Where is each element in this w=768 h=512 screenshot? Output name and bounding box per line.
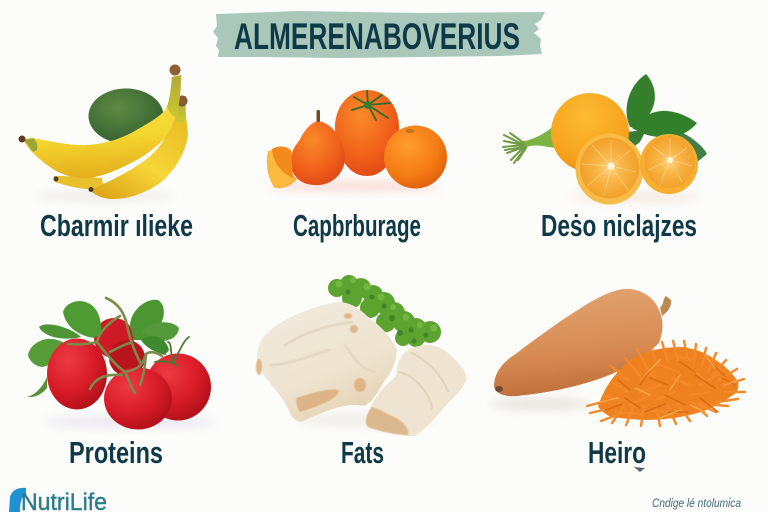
- icon: small banana tip: [54, 176, 104, 190]
- icon: sweet potato: [494, 289, 662, 396]
- label: carbohydrates-like label: Capbrburage: [293, 208, 421, 243]
- panel: orange fruits and tomato: [267, 90, 447, 190]
- label: heiro: Heiro: [588, 435, 646, 470]
- label: bananas: Cbarmir ılieke: [40, 208, 193, 243]
- footer note: Cndige lé ntolumica: [652, 498, 741, 510]
- panel: tomatoes on vine: [27, 298, 215, 430]
- label: proteins: Proteins: [69, 435, 163, 470]
- icon: back tomatoes: [94, 318, 134, 358]
- icon: large tomato: [335, 90, 399, 176]
- icon: tomato right: [145, 354, 211, 420]
- panel: chicken and lettuce: [256, 275, 467, 436]
- icon: small stem leaf: [27, 377, 47, 397]
- icon: orange wedge: [268, 146, 297, 188]
- label: fats: Fats: [341, 435, 384, 470]
- icon: small chicken piece: [366, 345, 467, 436]
- small mark below label: [634, 467, 645, 472]
- icon: front banana: [22, 75, 181, 178]
- icon: back banana: [90, 96, 188, 199]
- label: citrus: Deṡo niclajzes: [541, 208, 697, 243]
- icon: tomato left: [47, 338, 107, 410]
- panel: bananas and avocado: [18, 64, 188, 201]
- icon: tomato front: [104, 368, 172, 430]
- icon: leaves: [626, 74, 707, 163]
- icon: avocado: [88, 88, 164, 144]
- icon: shredded carrot: [587, 341, 745, 426]
- icon: round orange: [384, 126, 447, 188]
- icon: whole lemon with stem: [518, 125, 558, 150]
- icon: leaves: [28, 300, 179, 367]
- panel: sweet potato and shredded carrot: [490, 289, 745, 426]
- icon: orange half left: [576, 134, 644, 204]
- icon: large chicken piece: [257, 302, 397, 422]
- title banner: ALMERENABOVERIUS: [234, 16, 520, 57]
- icon: vine: [68, 298, 162, 393]
- title banner: [213, 11, 545, 58]
- panel: citrus: [503, 74, 707, 204]
- icon: lettuce: [328, 275, 441, 347]
- icon: pear-shaped orange: [291, 121, 345, 185]
- icon: orange half right: [640, 134, 698, 194]
- icon: logo swoosh: [9, 488, 26, 512]
